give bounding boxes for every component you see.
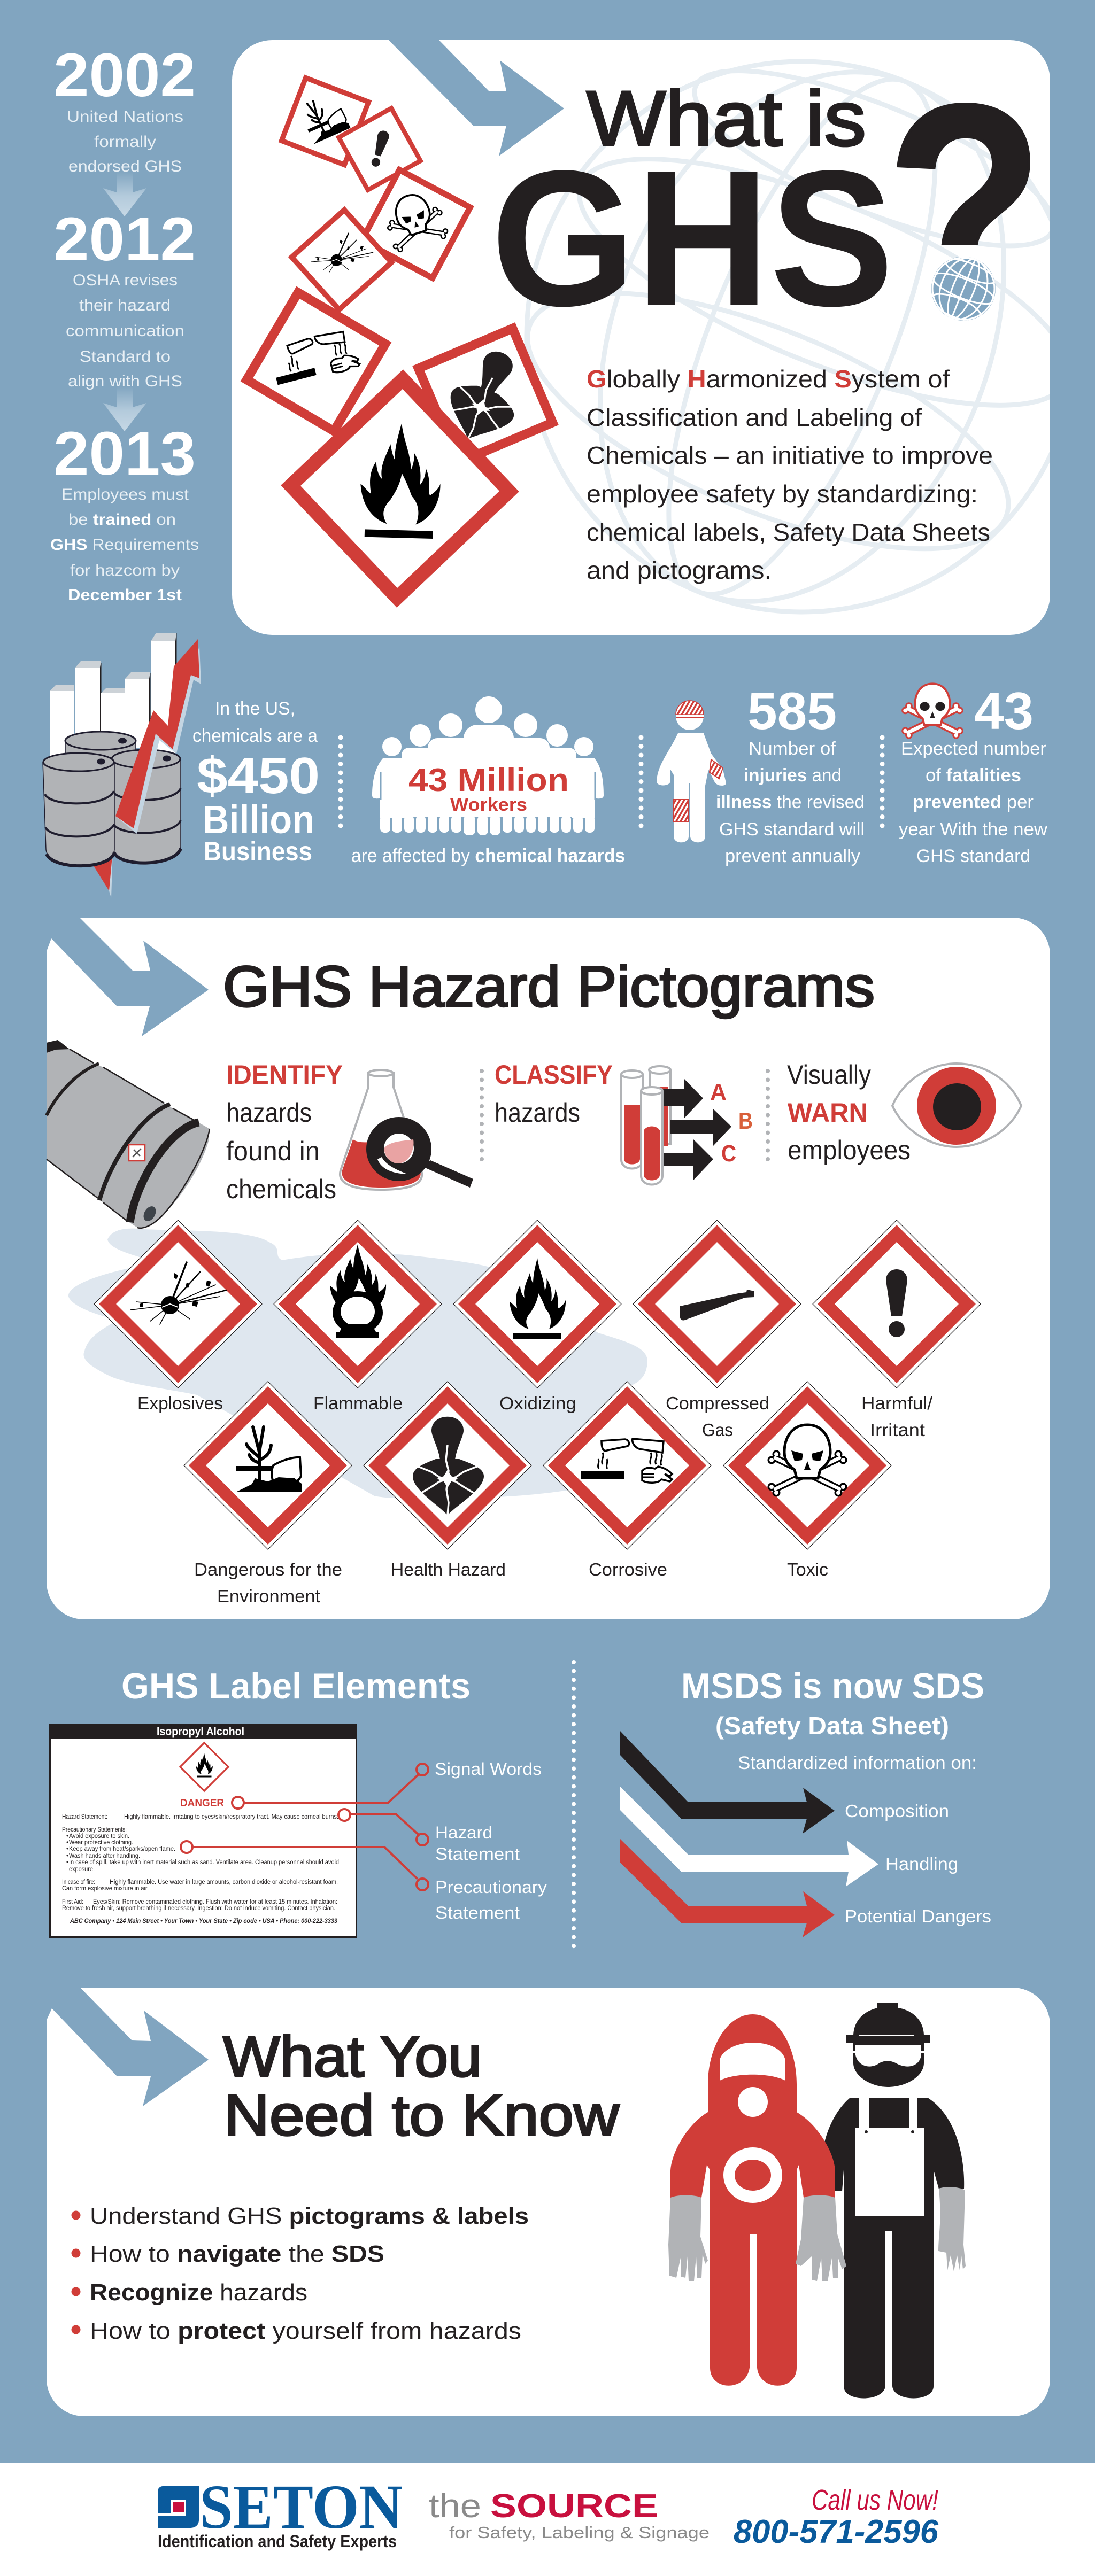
icon: label flame pictogram	[180, 1743, 228, 1791]
text: injuries prevented: illness the revised	[716, 792, 865, 812]
icon: test tubes and sort arrows: B	[738, 1108, 753, 1134]
text: fatalities prevented: year With the new	[899, 819, 1047, 840]
bullet list: How to navigate the SDS	[90, 2241, 384, 2267]
call to action	[734, 2484, 939, 2550]
text: fatalities prevented: prevented per	[913, 792, 1034, 812]
panel: what you need to know	[47, 1980, 1050, 2416]
text: GHS definition	[587, 365, 993, 584]
bullet list: Recognize hazards	[90, 2279, 307, 2306]
callout labels	[435, 1759, 547, 1922]
figure: hazmat suit	[668, 2014, 846, 2386]
icon: small globe	[931, 257, 996, 321]
arrow: 2012 to 2013	[103, 386, 146, 431]
bullet list: How to protect yourself from hazards	[90, 2318, 521, 2344]
pictogram labels: Explosives	[137, 1393, 223, 1413]
sample label: Remove to fresh air, support breathing if necessary. Ingestion: Do not induce vomiting. Contact physician.	[62, 1905, 335, 1912]
pictogram: toxic	[723, 1382, 891, 1549]
pictogram labels: Irritant	[870, 1420, 925, 1440]
pictogram: compressed gas	[633, 1220, 801, 1388]
call to action: 800-571-2596	[734, 2513, 939, 2550]
icon: right glove	[796, 2195, 846, 2281]
sample label: Eyes/Skin: Remove contaminated clothing. Flush with water for at least 15 minutes. Inhalation:	[93, 1899, 337, 1905]
sample label: Can form explosive mixture in air.	[62, 1886, 149, 1892]
text: GHS definition: Chemicals – an initiative to improve	[587, 441, 993, 469]
text: GHS definition: and pictograms.	[587, 556, 772, 584]
text: identify hazards: chemicals	[226, 1174, 336, 1204]
arrow: potential dangers	[620, 1838, 835, 1937]
sample label: Isopropyl Alcohol	[157, 1725, 244, 1738]
callout labels: Statement	[435, 1844, 520, 1864]
icon: flask and magnifier	[340, 1070, 473, 1190]
sample label: Wear protective clothing.	[69, 1840, 133, 1846]
pictogram labels: Corrosive	[589, 1559, 667, 1579]
pictogram: health hazard	[364, 1382, 531, 1549]
arrow labels: Handling	[885, 1854, 958, 1874]
figure: worker with hard hat	[822, 2003, 966, 2399]
panel: GHS hazard pictograms	[47, 909, 1050, 1619]
icon: eye	[892, 1064, 1021, 1147]
icon: tipped barrel	[47, 1040, 210, 1228]
text: employee training: Employees must	[61, 486, 189, 503]
pictogram: environment	[258, 54, 392, 189]
text: visually warn employees: Visually	[787, 1060, 871, 1090]
logo: the source	[429, 2488, 710, 2542]
pictogram: explosives	[94, 1220, 262, 1388]
panel: what is GHS	[232, 40, 1050, 635]
bullet list	[72, 2203, 529, 2344]
pictogram: harmful irritant	[813, 1220, 981, 1388]
pictogram labels: Compressed	[666, 1393, 769, 1413]
heading: GHS: GHS	[491, 130, 894, 346]
text: chemicals value: Business	[204, 836, 312, 866]
globe watermark	[524, 59, 1050, 615]
icon: back barrel	[65, 732, 136, 773]
text: injuries prevented: prevent annually	[725, 846, 860, 866]
year 2012: 2012	[53, 205, 196, 274]
panel: timeline	[50, 41, 199, 604]
chevron arrow	[389, 40, 564, 156]
pictogram labels: Dangerous for the	[194, 1559, 342, 1579]
text: employee training: for hazcom by	[70, 562, 180, 579]
text: OSHA revision	[66, 271, 184, 390]
sample label: Precautionary Statements:	[62, 1827, 127, 1833]
text: UN endorsement: formally	[94, 133, 156, 151]
sample label	[49, 1724, 357, 1938]
sample label: In case of spill, take up with inert material such as sand. Ventilate area. Cleanup personnel should avoid	[69, 1859, 339, 1866]
icon: red skull	[901, 684, 963, 739]
sample label: •	[66, 1846, 68, 1852]
heading: GHS Hazard Pictograms: GHS Hazard Pictograms	[223, 954, 875, 1019]
arrow: 2002 to 2012	[103, 172, 146, 216]
callout labels: Statement	[435, 1903, 520, 1922]
arrow labels: Composition	[845, 1801, 949, 1821]
arrow: rising red zigzag	[92, 639, 201, 898]
sample label: •	[66, 1853, 68, 1859]
sample label: •	[66, 1833, 68, 1840]
call to action: Call us Now!	[812, 2484, 938, 2516]
icon: injured person	[657, 701, 726, 842]
pictogram: environment	[184, 1382, 352, 1549]
text: UN endorsement: United Nations	[67, 108, 183, 126]
sample label: Highly flammable. Irritating to eyes/skin/respiratory tract. May cause corneal burns.	[124, 1814, 338, 1820]
pictogram: explosion	[285, 203, 398, 316]
text: injuries prevented: injuries and	[744, 765, 842, 786]
stat: chemical business	[43, 633, 320, 898]
pictogram labels: Oxidizing	[499, 1393, 576, 1413]
text: visually warn employees: WARN	[788, 1098, 868, 1128]
text: GHS definition: Classification and Labeling of	[587, 404, 922, 431]
sample label: Wash hands after handling.	[69, 1853, 140, 1859]
text: identify hazards: IDENTIFY	[226, 1060, 343, 1090]
sample label: exposure.	[69, 1866, 95, 1873]
icon: right barrel	[112, 750, 181, 863]
figure: 43 Million: 43 Million	[408, 762, 569, 798]
heading: MSDS is now SDS: MSDS is now SDS	[681, 1666, 984, 1706]
text: standardized information: Standardized information on:	[738, 1753, 977, 1773]
text: injuries prevented: GHS standard will	[719, 819, 865, 840]
subheading: safety data sheet: (Safety Data Sheet)	[715, 1712, 949, 1740]
sample label: ABC Company • 124 Main Street • Your Town • Your State • Zip code • USA • Phone: 000-222-3333	[70, 1918, 338, 1925]
arrow labels: Potential Dangers	[845, 1906, 991, 1926]
callout labels: Hazard	[435, 1823, 492, 1842]
text: employee training: December 1st	[68, 586, 182, 604]
arrow: handling	[620, 1786, 878, 1887]
panel: MSDS is now SDS	[620, 1666, 991, 1937]
pictogram: exclamation	[323, 92, 436, 206]
text: GHS definition: Globally Harmonized System of	[587, 365, 950, 393]
chevron arrow	[47, 909, 209, 1036]
arrow labels	[845, 1801, 991, 1926]
pictogram cluster	[221, 54, 588, 611]
pictogram: corrosion	[221, 267, 411, 457]
text: GHS definition: employee safety by standardizing:	[587, 480, 978, 508]
pictogram row two	[184, 1382, 891, 1549]
callout lines	[181, 1764, 428, 1890]
sample label: Keep away from heat/sparks/open flame.	[69, 1846, 175, 1852]
sample label: DANGER	[180, 1797, 225, 1809]
spill puddle	[68, 1229, 647, 1499]
text: UN endorsement	[67, 108, 183, 175]
logo: the source: SOURCE	[490, 2488, 658, 2525]
heading: what you need to know: Need to Know	[224, 2083, 620, 2147]
pictogram: flame	[277, 366, 522, 611]
icon: crowd of workers	[372, 696, 604, 835]
sample label: Highly flammable. Use water in large amounts, carbon dioxide or alcohol-resistant foam.	[110, 1879, 338, 1886]
text: identify hazards	[226, 1060, 343, 1204]
logo: the source: for Safety, Labeling & Signage	[449, 2523, 710, 2542]
text: OSHA revision: their hazard	[79, 297, 171, 314]
pictogram row one	[94, 1220, 981, 1388]
stat: 43 fatalities	[899, 681, 1047, 866]
arrow: composition	[620, 1731, 835, 1834]
chevron arrow	[47, 1980, 209, 2106]
text: classify hazards	[495, 1060, 613, 1128]
text: OSHA revision: Standard to	[80, 348, 171, 366]
text: visually warn employees: employees	[788, 1135, 911, 1165]
pictogram labels: Flammable	[313, 1393, 403, 1413]
text: chemicals value	[192, 699, 320, 866]
text: affected by hazards: are affected by chemical hazards	[351, 844, 625, 866]
callout labels: Precautionary	[435, 1877, 547, 1897]
logo: Seton: Identification and Safety Experts	[158, 2532, 397, 2551]
pictogram labels: Environment	[217, 1586, 320, 1606]
pictogram labels: Toxic	[787, 1559, 828, 1579]
pictogram: oxidizing	[453, 1220, 621, 1388]
sample label: •	[66, 1859, 68, 1866]
heading: GHS Label Elements: GHS Label Elements	[121, 1666, 471, 1706]
text: injuries prevented	[716, 739, 865, 866]
pictogram labels: Harmful/	[861, 1393, 933, 1413]
sample label: In case of fire:	[62, 1879, 95, 1886]
icon: test tubes and sort arrows: A	[710, 1079, 727, 1105]
bar chart	[50, 633, 176, 761]
year 2002: 2002	[53, 41, 196, 110]
pictogram: skull	[340, 148, 492, 300]
year 2013: 2013	[53, 420, 196, 488]
text: identify hazards: found in	[226, 1136, 320, 1166]
text: identify hazards: hazards	[226, 1098, 312, 1128]
text: injuries prevented: Number of	[749, 739, 836, 759]
pictogram: corrosive	[543, 1382, 711, 1549]
heading: question mark: ?	[886, 43, 1044, 372]
logo: the source: the	[429, 2488, 481, 2525]
text: chemicals value: chemicals are a	[192, 726, 318, 746]
sample label: First Aid:	[62, 1899, 83, 1905]
text: fatalities prevented: of fatalities	[926, 765, 1021, 786]
callout labels: Signal Words	[435, 1759, 542, 1779]
text: fatalities prevented: GHS standard	[916, 846, 1030, 866]
text: OSHA revision: communication	[66, 322, 184, 340]
pictogram labels: Health Hazard	[391, 1559, 506, 1579]
sample label: •	[66, 1840, 68, 1846]
text: OSHA revision: align with GHS	[68, 373, 182, 390]
pictogram: health hazard	[383, 293, 588, 498]
stat: 43 million workers	[351, 696, 625, 866]
text: classify hazards: CLASSIFY	[495, 1060, 613, 1090]
number: 585: 585	[747, 681, 837, 740]
panel: GHS label elements	[49, 1666, 547, 1938]
text: OSHA revision: OSHA revises	[73, 271, 178, 289]
text: chemicals value: In the US,	[215, 699, 295, 719]
icon: test tubes and sort arrows: C	[721, 1140, 736, 1167]
pictogram labels	[137, 1393, 933, 1606]
text: UN endorsement: endorsed GHS	[68, 158, 182, 175]
text: chemicals value: Billion	[203, 797, 314, 842]
text: employee training: GHS Requirements	[50, 536, 199, 554]
text: employee training: be trained on	[68, 511, 176, 529]
text: classify hazards: hazards	[495, 1098, 580, 1128]
pictogram: flammable	[274, 1220, 442, 1388]
heading: what you need to know	[223, 2024, 620, 2147]
bullet list: Understand GHS pictograms & labels	[90, 2203, 529, 2229]
heading: what you need to know: What You	[223, 2024, 482, 2089]
figure: Workers: Workers	[450, 795, 527, 815]
heading: What is: What is	[587, 75, 866, 162]
logo: Seton: SETON	[199, 2472, 403, 2542]
text: employee training	[50, 486, 199, 604]
sample label: Hazard Statement:	[62, 1814, 107, 1820]
text: visually warn employees	[787, 1060, 911, 1165]
pictogram labels: Gas	[702, 1420, 733, 1440]
icon: front barrel	[43, 753, 114, 866]
icon: test tubes and sort arrows	[621, 1066, 753, 1184]
icon: left glove	[668, 2195, 708, 2281]
text: chemicals value: $450	[197, 747, 320, 804]
stat: 585 injuries	[657, 681, 865, 866]
number: 43: 43	[974, 681, 1034, 740]
footer	[0, 2463, 1095, 2576]
sample label: Avoid exposure to skin.	[69, 1833, 129, 1840]
text: fatalities prevented: Expected number	[901, 739, 1046, 759]
text: fatalities prevented	[899, 739, 1047, 866]
text: GHS definition: chemical labels, Safety Data Sheets	[587, 518, 990, 546]
